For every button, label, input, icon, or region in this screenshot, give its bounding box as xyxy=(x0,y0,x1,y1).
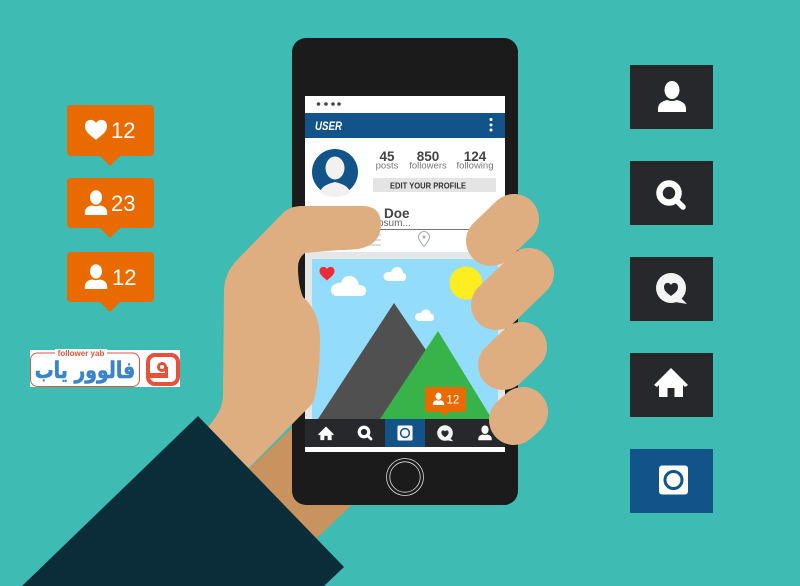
profile stats: 45 xyxy=(379,149,395,164)
small notification bubble xyxy=(425,387,466,416)
mountains xyxy=(318,303,430,419)
heart xyxy=(320,267,334,280)
app header xyxy=(305,113,505,138)
hand: palm and thumb xyxy=(205,206,381,477)
logo mark xyxy=(146,355,178,384)
profile stats: following xyxy=(457,160,493,172)
profile stats xyxy=(376,149,493,172)
fingers xyxy=(491,219,529,420)
status dots xyxy=(317,102,341,106)
icon tile: home xyxy=(630,353,713,417)
sleeve xyxy=(22,416,344,586)
notification bubble: followers 23 xyxy=(67,178,154,238)
notification bubble: followers 12: 12 xyxy=(112,265,136,290)
notification bubble: likes: 12 xyxy=(111,118,135,143)
clouds xyxy=(331,267,434,321)
profile avatar xyxy=(312,149,358,197)
phone screen xyxy=(305,96,505,452)
location pin xyxy=(418,232,430,246)
logo: follower yab: follower yab xyxy=(58,349,104,358)
hand: shaded palm behind phone xyxy=(240,427,360,554)
icon tile: profile xyxy=(630,65,713,129)
picture card xyxy=(305,252,505,419)
edit profile button: EDIT YOUR PROFILE xyxy=(390,180,466,190)
app header: USER xyxy=(315,121,343,133)
home button xyxy=(386,458,424,496)
phone xyxy=(292,38,518,505)
profile stats: followers xyxy=(409,160,447,172)
icon tile: heart chat xyxy=(630,257,713,321)
profile name: Doe xyxy=(384,206,410,221)
profile stats: 850 xyxy=(417,149,439,164)
profile name: psum... xyxy=(378,218,411,229)
profile name xyxy=(378,206,411,229)
profile stats: posts xyxy=(376,160,399,172)
profile stats: 124 xyxy=(464,149,487,164)
edit profile button xyxy=(373,178,496,192)
menu lines xyxy=(368,235,381,245)
notification bubble: followers 12 xyxy=(67,252,154,312)
small notification bubble: 12 xyxy=(446,394,459,406)
icon tile: camera xyxy=(630,449,713,513)
bottom navigation xyxy=(305,419,505,447)
notification bubble: followers 23: 23 xyxy=(111,191,135,216)
logo: follower yab: فالوور یاب xyxy=(35,356,135,383)
icon tile: search xyxy=(630,161,713,225)
logo: follower yab xyxy=(30,349,180,387)
sun xyxy=(450,266,482,300)
notification bubble: likes xyxy=(67,105,154,166)
